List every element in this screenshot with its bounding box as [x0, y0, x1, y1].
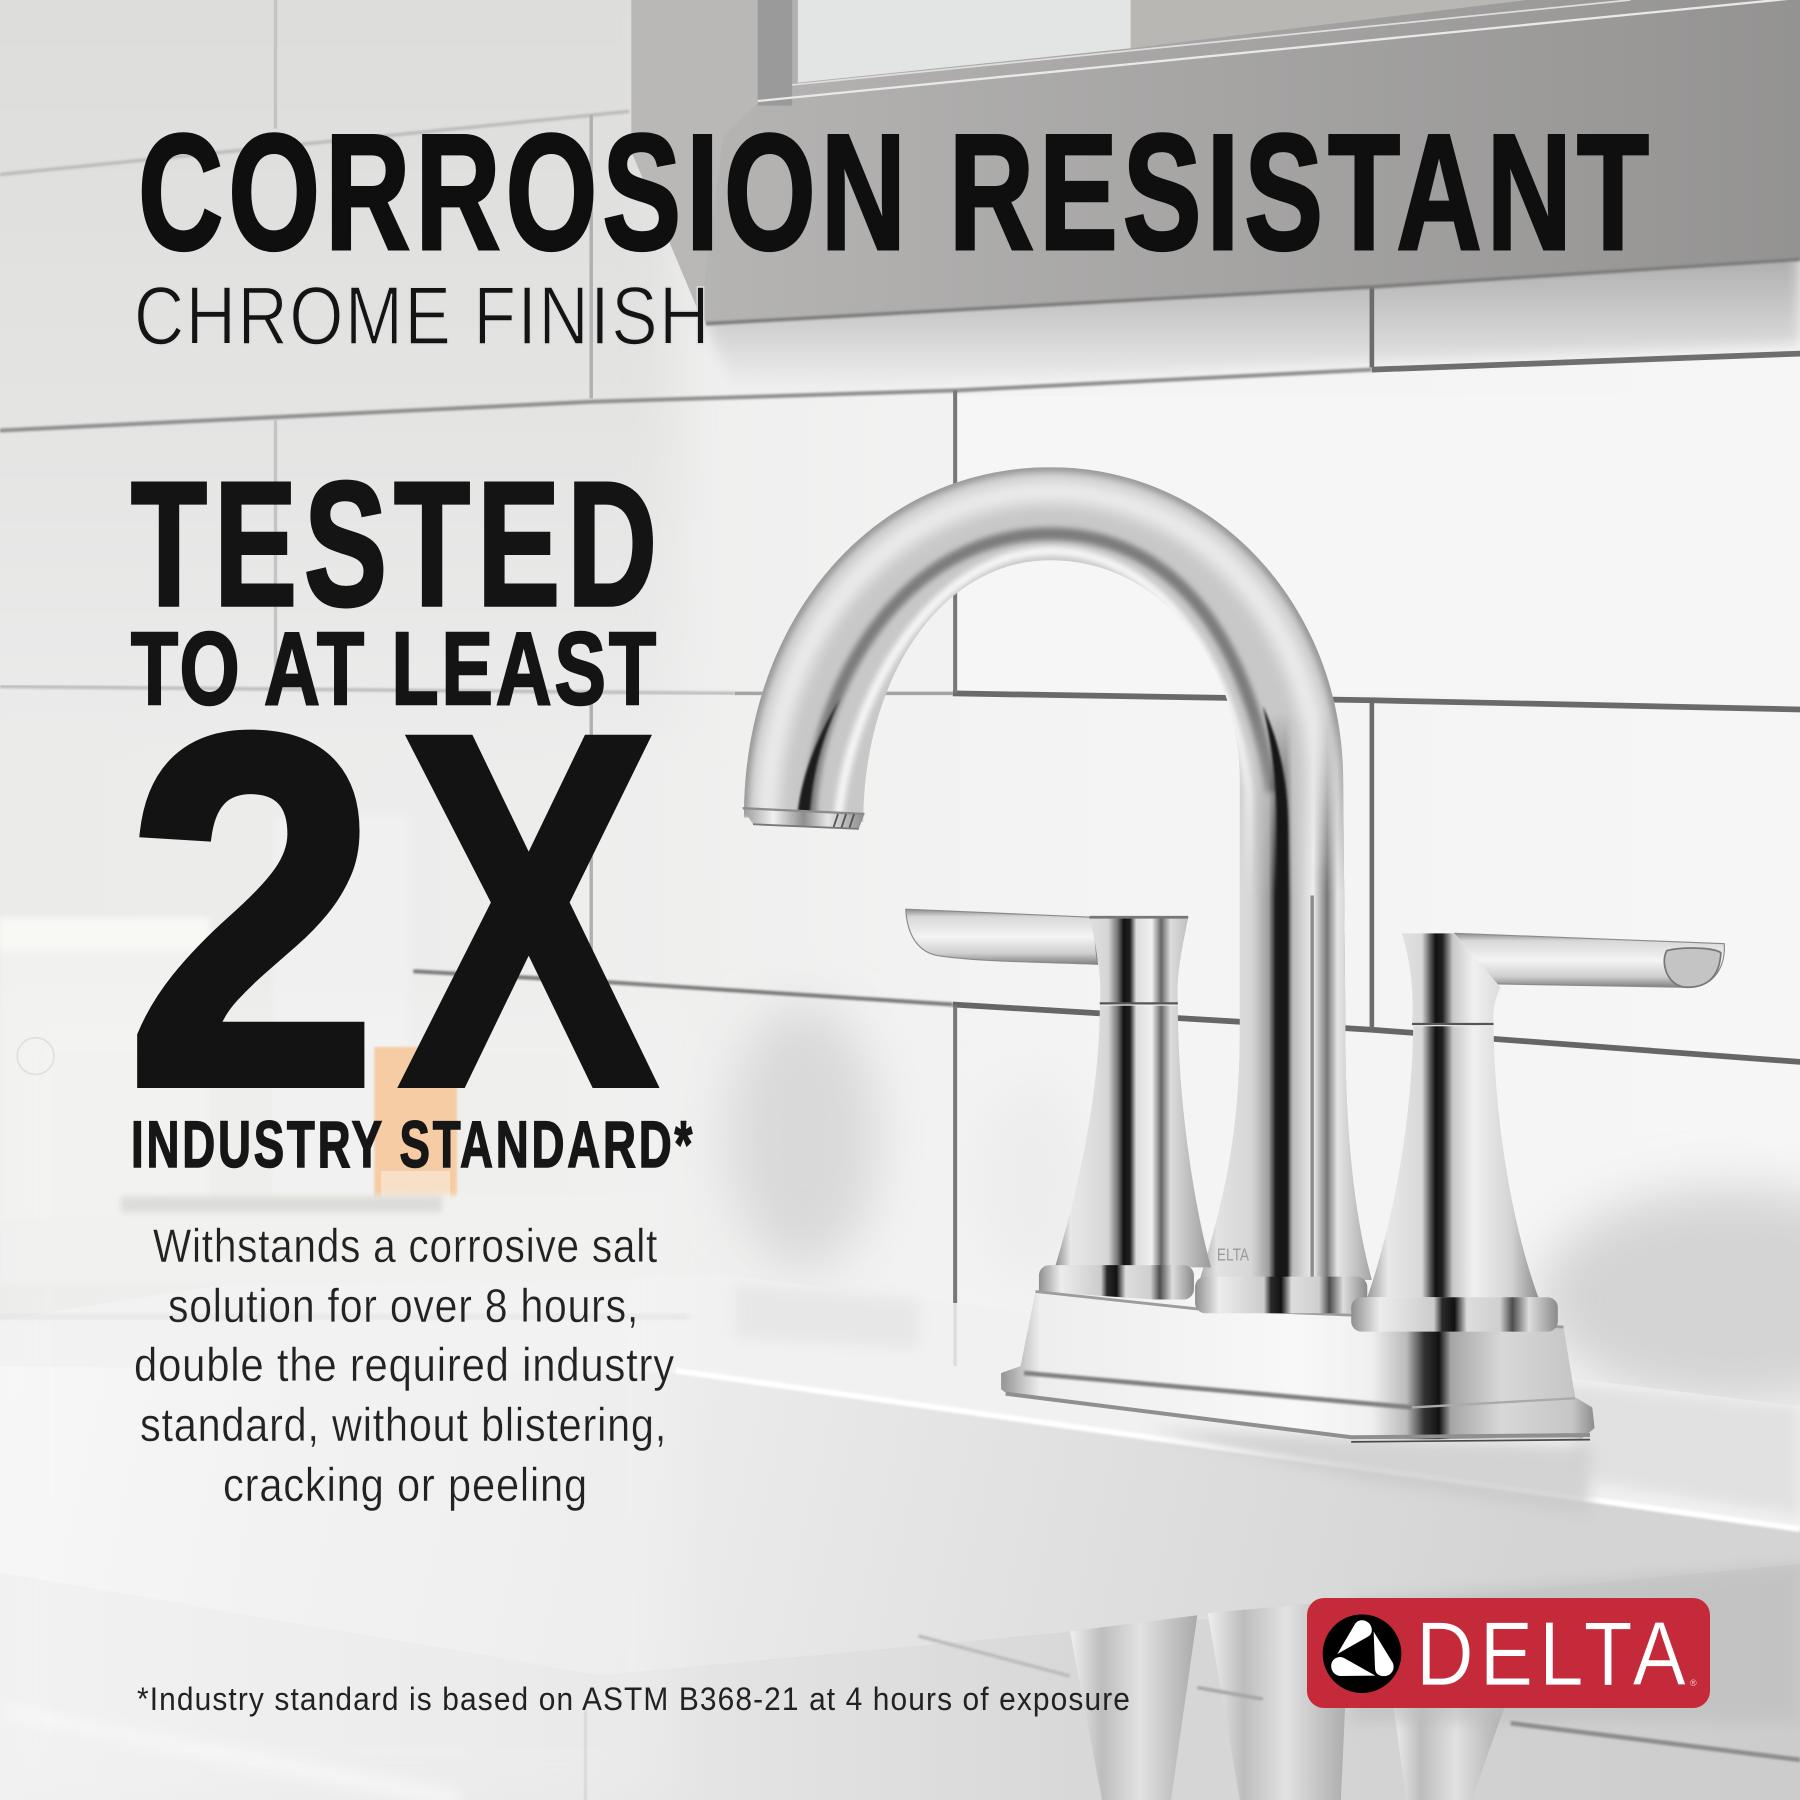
- registered mark: ®: [1690, 1678, 1697, 1688]
- sink rim highlight: [676, 1371, 1800, 1529]
- counter reflections: [735, 1283, 1800, 1515]
- left handle body: [1039, 917, 1211, 1300]
- body copy: standard, without blistering,: [140, 1398, 667, 1451]
- faucet reflection under sink: [0, 1564, 1800, 1800]
- sink front: [0, 1366, 1800, 1675]
- body copy: [134, 1219, 675, 1511]
- right handle body: [1351, 933, 1558, 1332]
- body copy: double the required industry: [134, 1338, 675, 1391]
- plate reflection on counter: [1148, 1429, 1590, 1515]
- left handle lever: [906, 909, 1097, 964]
- Delta logo: [1307, 1598, 1710, 1708]
- left wash overlay: [0, 1000, 680, 1800]
- big stat: 2X: [126, 631, 658, 1189]
- body copy: solution for over 8 hours,: [168, 1279, 639, 1332]
- spout: [744, 467, 1372, 1280]
- heading: industry standard: INDUSTRY STANDARD*: [131, 1107, 695, 1181]
- big stat: 2X: X: [401, 631, 658, 1189]
- counter top: [0, 1274, 1800, 1538]
- logo emblem: [1323, 1614, 1401, 1693]
- centre collar: [1195, 1277, 1367, 1313]
- right handle lever end: [1664, 948, 1721, 987]
- logo wordmark: DELTA: [1416, 1604, 1692, 1705]
- body copy: cracking or peeling: [223, 1458, 588, 1511]
- deck plate: [1001, 1292, 1595, 1442]
- logo badge: [1307, 1598, 1710, 1708]
- footnote: *Industry standard is based on ASTM B368-21 at 4 hours of exposure: [137, 1681, 1131, 1717]
- spout nozzle: [743, 808, 864, 829]
- grout lines: [0, 0, 1800, 1303]
- brand mark on faucet: ELTA: [1217, 1245, 1249, 1265]
- heading: tested: TESTED: [131, 445, 664, 643]
- faucet: [689, 436, 1724, 1442]
- subtitle: CHROME FINISH: [134, 269, 711, 362]
- blurred toiletries on tray: [0, 815, 689, 1319]
- right handle lever: [1455, 933, 1724, 987]
- mirror shadow on tiles: [700, 247, 1800, 393]
- mirror frame: [631, 0, 1800, 324]
- heading: to at least: TO AT LEAST: [131, 611, 659, 726]
- lower cabinet area: [0, 1564, 1800, 1800]
- body copy: Withstands a corrosive salt: [153, 1219, 658, 1272]
- big stat: 2X: 2: [126, 631, 378, 1189]
